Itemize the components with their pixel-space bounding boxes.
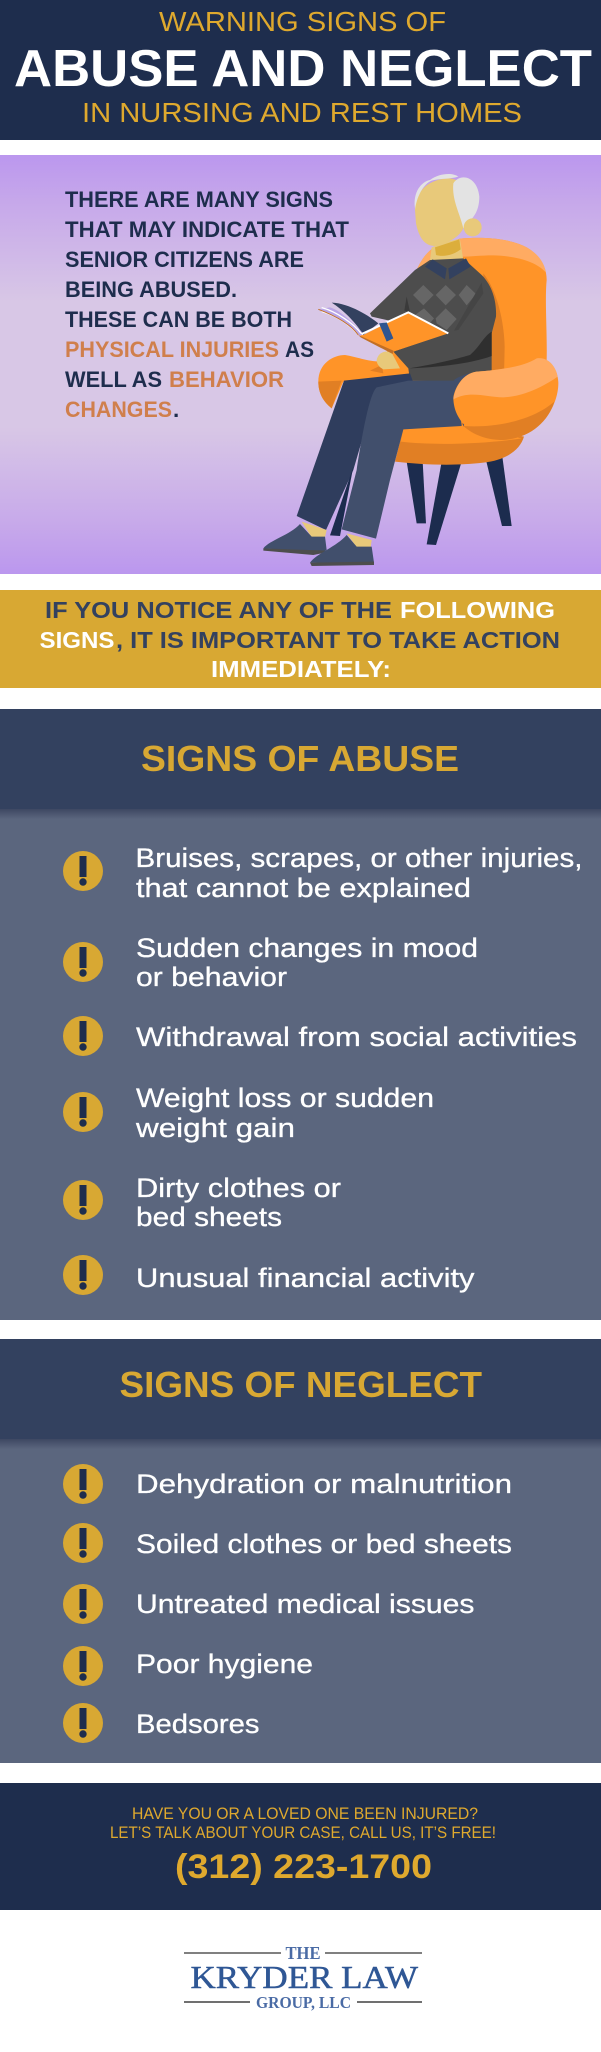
intro text block: WELL AS bbox=[65, 367, 162, 392]
item: untreated medical issues bbox=[63, 1584, 474, 1624]
item: weight: weight gain bbox=[135, 1113, 295, 1143]
panel: signs of neglect bbox=[0, 1339, 601, 1763]
item: bruises: Bruises, scrapes, or other injuries, bbox=[136, 843, 582, 873]
intro text block: BEHAVIOR bbox=[169, 367, 284, 392]
item: bedsores bbox=[63, 1703, 260, 1743]
intro text block: BEING ABUSED. bbox=[65, 277, 237, 302]
contact footer: HAVE YOU OR A LOVED ONE BEEN INJURED? bbox=[132, 1805, 478, 1823]
intro text block: THERE ARE MANY SIGNS bbox=[65, 187, 333, 212]
item: sudden changes bbox=[63, 933, 478, 992]
intro text block: PHYSICAL INJURIES bbox=[65, 337, 279, 362]
item: weight bbox=[63, 1083, 434, 1143]
illustration: senior man reading in armchair bbox=[263, 174, 558, 566]
intro text block: THAT MAY INDICATE THAT bbox=[65, 217, 349, 242]
call to action banner: SIGNS bbox=[40, 627, 115, 653]
panel: signs of abuse bbox=[0, 709, 601, 1320]
logo: the kryder law group: KRYDER LAW bbox=[190, 1959, 419, 1995]
heading: signs of neglect: SIGNS OF NEGLECT bbox=[120, 1364, 482, 1405]
item: dirty clothes: Dirty clothes or bbox=[136, 1173, 341, 1203]
item: poor hygiene: Poor hygiene bbox=[136, 1649, 313, 1679]
item: untreated medical issues: Untreated medical issues bbox=[136, 1589, 474, 1619]
item: dehydration bbox=[63, 1464, 512, 1504]
item: financial activity: Unusual financial activity bbox=[136, 1263, 475, 1293]
call to action banner: IMMEDIATELY: bbox=[211, 656, 391, 682]
contact footer bbox=[0, 1783, 601, 1910]
title line: warning signs of: WARNING SIGNS OF bbox=[159, 6, 446, 37]
item: sudden changes: or behavior bbox=[136, 962, 287, 992]
intro text block: THESE CAN BE BOTH bbox=[65, 307, 292, 332]
item: bruises bbox=[63, 843, 582, 903]
item: financial activity bbox=[63, 1255, 475, 1295]
heading: signs of abuse: SIGNS OF ABUSE bbox=[141, 738, 459, 779]
call to action banner: , IT IS IMPORTANT TO TAKE ACTION bbox=[116, 627, 560, 653]
item: withdrawal: Withdrawal from social activities bbox=[136, 1022, 577, 1052]
contact footer: LET’S TALK ABOUT YOUR CASE, CALL US, IT’S FREE! bbox=[110, 1824, 496, 1842]
logo: the kryder law group: GROUP, LLC bbox=[256, 1993, 351, 2012]
intro text block bbox=[65, 187, 349, 422]
item: sudden changes: Sudden changes in mood bbox=[136, 933, 478, 963]
item: dirty clothes: bed sheets bbox=[136, 1202, 282, 1232]
intro text block: SENIOR CITIZENS ARE bbox=[65, 247, 304, 272]
title line: in nursing and rest homes: IN NURSING AND REST HOMES bbox=[82, 97, 522, 128]
phone number: (312) 223-1700 bbox=[175, 1848, 432, 1886]
item: soiled clothes bbox=[63, 1523, 512, 1563]
item: bedsores: Bedsores bbox=[136, 1709, 260, 1739]
call to action banner: IF YOU NOTICE ANY OF THE bbox=[45, 597, 392, 623]
item: weight: Weight loss or sudden bbox=[136, 1083, 434, 1113]
title banner bbox=[0, 0, 601, 140]
item: bruises: that cannot be explained bbox=[136, 873, 471, 903]
call to action banner: FOLLOWING bbox=[400, 597, 555, 623]
call to action banner bbox=[0, 590, 601, 688]
logo: the kryder law group: THE bbox=[286, 1943, 320, 1963]
item: soiled clothes: Soiled clothes or bed sheets bbox=[136, 1529, 512, 1559]
item: withdrawal bbox=[63, 1016, 577, 1056]
heading: signs of abuse bbox=[0, 709, 601, 809]
heading: signs of neglect bbox=[0, 1339, 601, 1439]
panel: introduction with illustration bbox=[0, 155, 601, 574]
intro text block: . bbox=[173, 397, 179, 422]
intro text block: CHANGES bbox=[65, 397, 172, 422]
logo: the kryder law group bbox=[184, 1943, 422, 2012]
item: dirty clothes bbox=[63, 1173, 341, 1232]
intro text block: AS bbox=[285, 337, 314, 362]
item: dehydration: Dehydration or malnutrition bbox=[136, 1469, 512, 1499]
item: poor hygiene bbox=[63, 1646, 313, 1686]
title line: abuse and neglect: ABUSE AND NEGLECT bbox=[14, 40, 592, 98]
